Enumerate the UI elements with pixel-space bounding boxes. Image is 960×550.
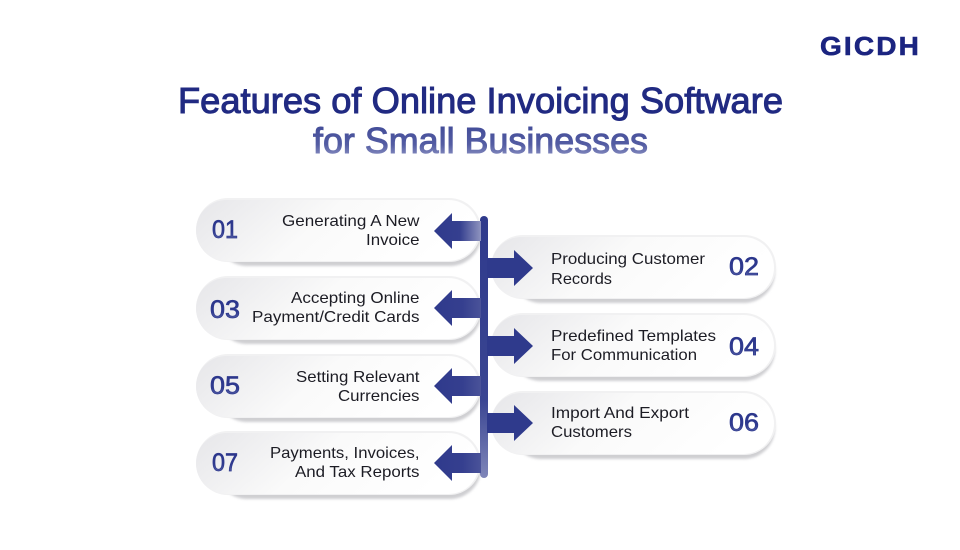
label 04: For Communication [551, 347, 697, 364]
number 03: 03 [210, 296, 240, 324]
logo: GICDH [820, 31, 921, 61]
arrow 01 [434, 213, 481, 249]
label 01: Invoice [366, 232, 420, 249]
label 05: Setting Relevant [296, 369, 420, 386]
arrow 06 [487, 405, 533, 441]
number 02: 02 [729, 253, 759, 281]
pill 06 [491, 391, 776, 459]
label 03 [252, 290, 420, 326]
subtitle: for Small Businesses [313, 120, 648, 161]
label 01 [282, 213, 420, 249]
label 02: Records [551, 271, 612, 288]
label 06: Customers [551, 424, 632, 441]
label 03: Payment/Credit Cards [252, 309, 420, 326]
label 03: Accepting Online [291, 290, 420, 307]
label 01: Generating A New [282, 213, 420, 230]
arrow 07 [434, 445, 481, 481]
label 07: And Tax Reports [295, 464, 420, 481]
number 05: 05 [210, 372, 240, 400]
number 07: 07 [212, 449, 238, 477]
pill 01 [196, 198, 481, 266]
pill 03 [196, 276, 481, 344]
label 04: Predefined Templates [551, 328, 716, 345]
label 07 [270, 445, 420, 481]
arrow 03 [434, 290, 481, 326]
label 04 [551, 328, 716, 364]
pill 04 [491, 313, 776, 381]
label 02 [551, 251, 705, 288]
label 02: Producing Customer [551, 251, 705, 268]
pill 02 [491, 235, 776, 303]
arrow 02 [487, 250, 533, 286]
pill 05 [196, 354, 481, 422]
number 04: 04 [729, 333, 759, 361]
vertical connector bar [480, 216, 488, 478]
label 05 [296, 369, 420, 405]
arrow 05 [434, 368, 481, 404]
label 06: Import And Export [551, 405, 690, 422]
title [178, 80, 783, 161]
label 06 [551, 405, 690, 441]
pill 07 [196, 431, 481, 499]
arrow 04 [487, 328, 533, 364]
number 01: 01 [212, 216, 238, 244]
label 05: Currencies [338, 388, 420, 405]
label 07: Payments, Invoices, [270, 445, 420, 462]
title: Features of Online Invoicing Software [178, 80, 783, 121]
number 06: 06 [729, 409, 759, 437]
